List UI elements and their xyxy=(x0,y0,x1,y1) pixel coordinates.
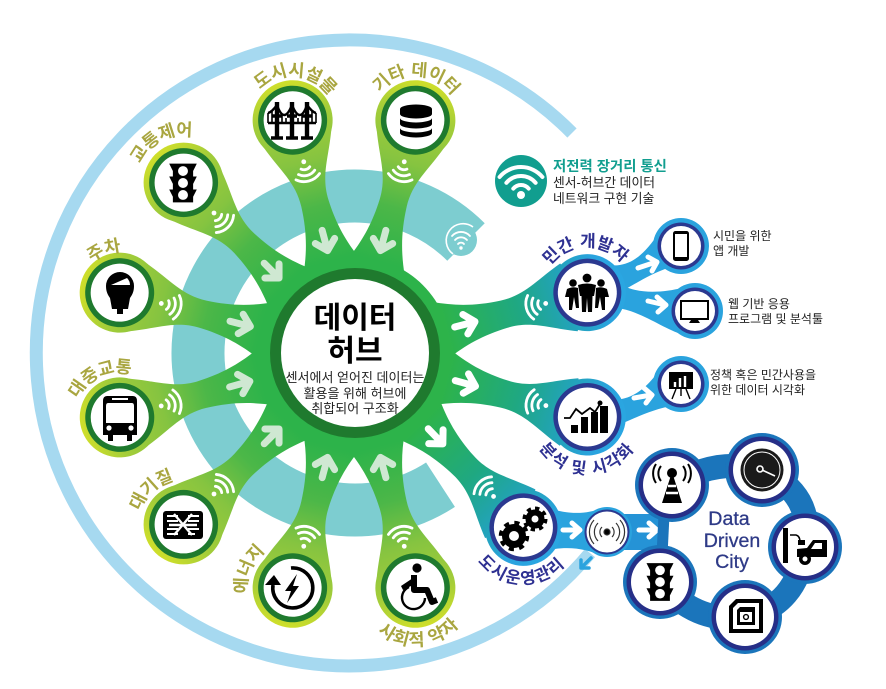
output node: 민간 개발자 xyxy=(436,232,630,354)
text: web applications: 웹 기반 응용 xyxy=(728,297,790,311)
arrow: to monitor xyxy=(648,297,666,312)
city node: electric truck xyxy=(768,510,842,584)
connector: city operations to sensor xyxy=(540,505,602,556)
teal network arc xyxy=(198,196,466,510)
icon: broadcast sensor xyxy=(589,520,625,544)
label: 대기질: 대기질 xyxy=(128,467,173,510)
icon: bus xyxy=(103,396,137,441)
app node: monitor xyxy=(667,283,723,339)
text: data visualization: 위한 데이터 시각화 xyxy=(710,383,805,397)
text: citizen apps: 앱 개발 xyxy=(713,244,749,258)
icon: air quality panel xyxy=(163,511,203,539)
label: 기타 데이터: 기타 데이터 xyxy=(372,62,462,96)
icon: wifi on teal arc xyxy=(445,224,477,256)
arrow: to phone xyxy=(638,257,657,271)
label: 에너지: 에너지 xyxy=(232,542,265,592)
source node: 기타 데이터 xyxy=(354,62,462,270)
source node: 대기질 xyxy=(128,404,304,564)
app node: presentation xyxy=(653,356,709,412)
city node: antenna xyxy=(635,448,709,522)
label: 대중교통: 대중교통 xyxy=(68,358,131,396)
legend body: 센서-허브간 데이터 xyxy=(553,175,655,190)
icon: phone xyxy=(673,231,689,261)
label: 도시시설물: 도시시설물 xyxy=(254,62,338,96)
label: 주차: 주차 xyxy=(86,237,120,260)
city node: gauge xyxy=(725,433,799,507)
hub circle xyxy=(270,268,440,438)
sensor node xyxy=(582,507,632,557)
arrow: feedback to outer arc xyxy=(581,558,591,568)
text: citizen apps: 시민을 위한 xyxy=(713,229,772,243)
icon: wheelchair xyxy=(401,563,437,609)
icon: presentation board xyxy=(669,372,693,399)
city node: chip xyxy=(708,580,782,654)
label: 민간 개발자: 민간 개발자 xyxy=(542,232,630,264)
icon: traffic light xyxy=(169,164,197,202)
hub description: 취합되어 구조화 xyxy=(311,401,399,416)
hub title: 데이터 xyxy=(314,302,396,335)
app node: phone xyxy=(653,218,709,274)
output node: 분석 및 시각화 xyxy=(440,354,634,476)
legend body: 네트워크 구현 기술 xyxy=(553,191,655,206)
text: data visualization: 정책 혹은 민간사용을 xyxy=(710,367,816,382)
label: 사회적 약자: 사회적 약자 xyxy=(380,617,458,648)
source node: 주차 xyxy=(80,237,270,354)
legend: low power wide area xyxy=(495,155,667,207)
hub description: 활용을 위해 허브에 xyxy=(304,386,406,401)
connector: sensor to city ring xyxy=(618,514,666,550)
icon: wifi badge xyxy=(495,155,547,207)
source node: 도시시설물 xyxy=(252,62,354,268)
icon: growth chart xyxy=(564,400,608,433)
hub title second line: 허브 xyxy=(327,335,383,368)
label: 교통제어: 교통제어 xyxy=(130,121,191,163)
arrow: to sensor xyxy=(563,523,580,537)
icon: energy cycle xyxy=(265,568,313,608)
icon: parking meter xyxy=(106,272,134,314)
city title: City xyxy=(715,551,749,573)
legend title: 저전력 장거리 통신 xyxy=(553,158,667,175)
city title: Driven xyxy=(704,530,760,552)
icon: database xyxy=(400,104,432,138)
text: web applications: 프로그램 및 분석툴 xyxy=(728,312,823,326)
icon: gears xyxy=(501,508,546,549)
icon: three people xyxy=(565,274,609,312)
label: 도시운영관리: 도시운영관리 xyxy=(478,554,564,586)
source node: 대중교통 xyxy=(68,354,270,458)
icon: monitor xyxy=(681,301,708,323)
outer light blue arc xyxy=(36,40,590,666)
label: 분석 및 시각화: 분석 및 시각화 xyxy=(539,442,634,476)
city title: Data xyxy=(708,508,750,530)
data driven city ring xyxy=(623,433,842,654)
hub description: 센서에서 얻어진 데이터는 xyxy=(286,370,424,385)
icon: bridge xyxy=(268,102,316,138)
arrow: to city ring xyxy=(639,523,657,537)
connector: developer to apps xyxy=(608,228,702,428)
output node: 도시운영관리 xyxy=(403,404,564,586)
source node: 사회적 약자 xyxy=(354,439,458,648)
source node: 에너지 xyxy=(232,438,354,628)
hub green star base xyxy=(259,257,451,449)
city node: traffic light xyxy=(623,545,697,619)
source node: 교통제어 xyxy=(130,121,305,304)
arrow: to presentation xyxy=(634,388,652,403)
